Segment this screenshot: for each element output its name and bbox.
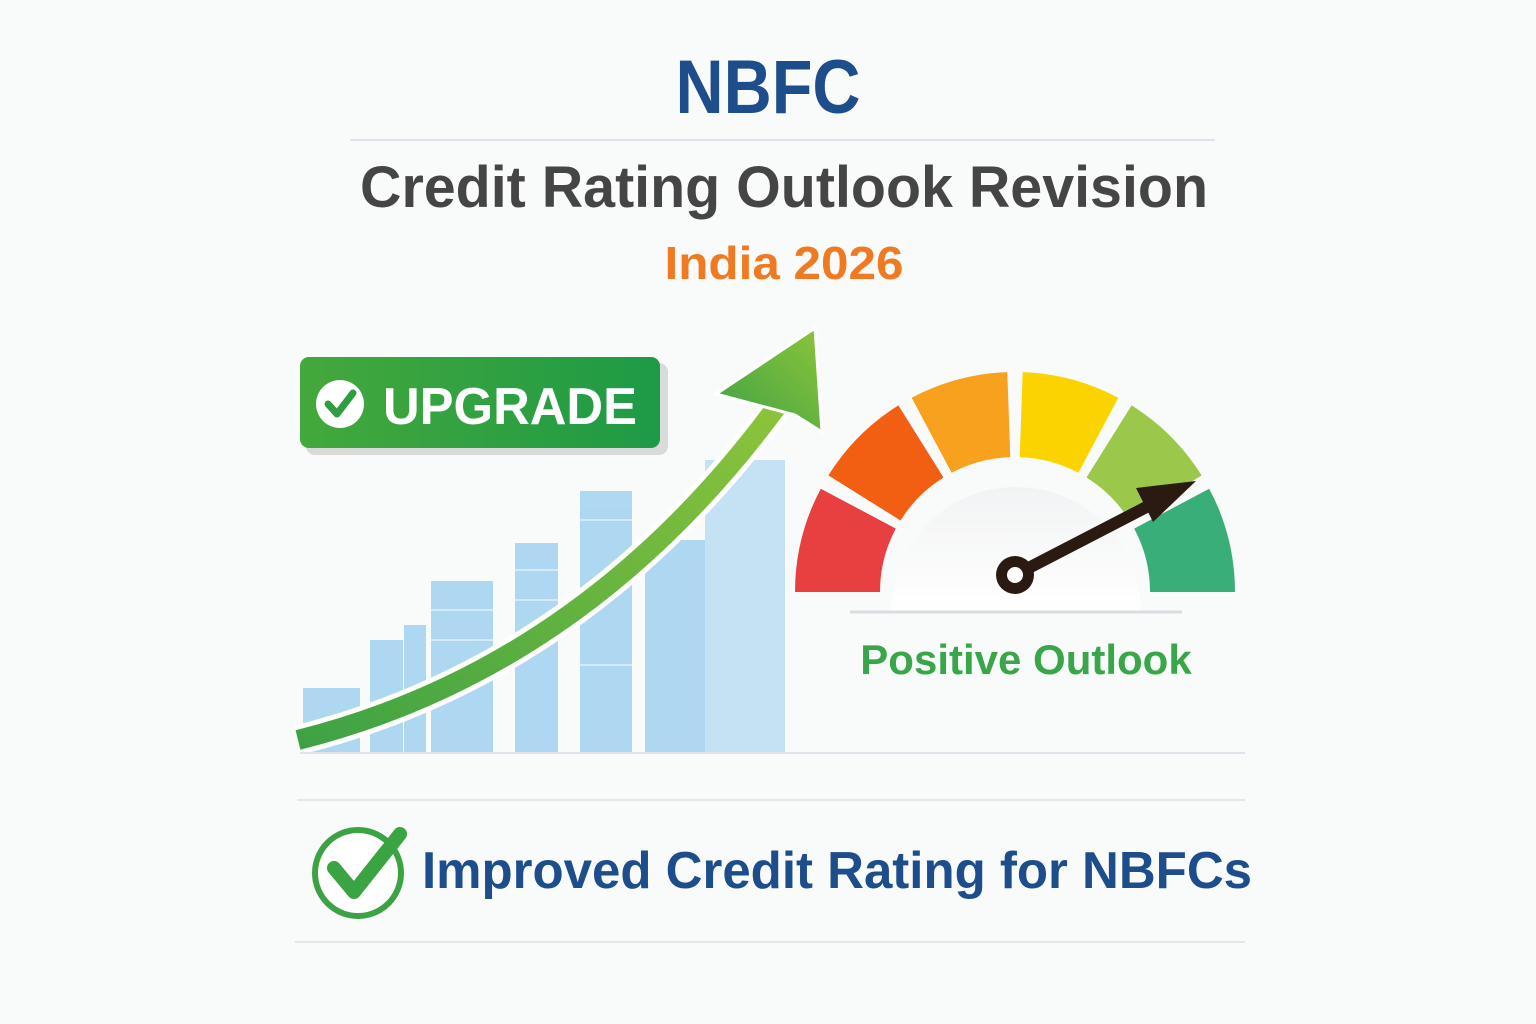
icon: check circle bbox=[315, 830, 401, 916]
bottom statement: Improved Credit Rating for NBFCs bbox=[422, 842, 1252, 900]
needle bbox=[996, 481, 1196, 594]
subtitle: Credit Rating Outlook Revision bbox=[360, 155, 1208, 220]
building bars chart bbox=[303, 460, 785, 752]
badge: upgrade bbox=[300, 357, 668, 455]
gauge bbox=[795, 372, 1235, 612]
year label: India 2026 bbox=[664, 237, 904, 289]
title: NBFC bbox=[676, 45, 860, 130]
arrow: growth bbox=[298, 328, 822, 740]
gauge label: Positive Outlook bbox=[860, 636, 1192, 683]
badge: upgrade: UPGRADE bbox=[383, 378, 637, 436]
